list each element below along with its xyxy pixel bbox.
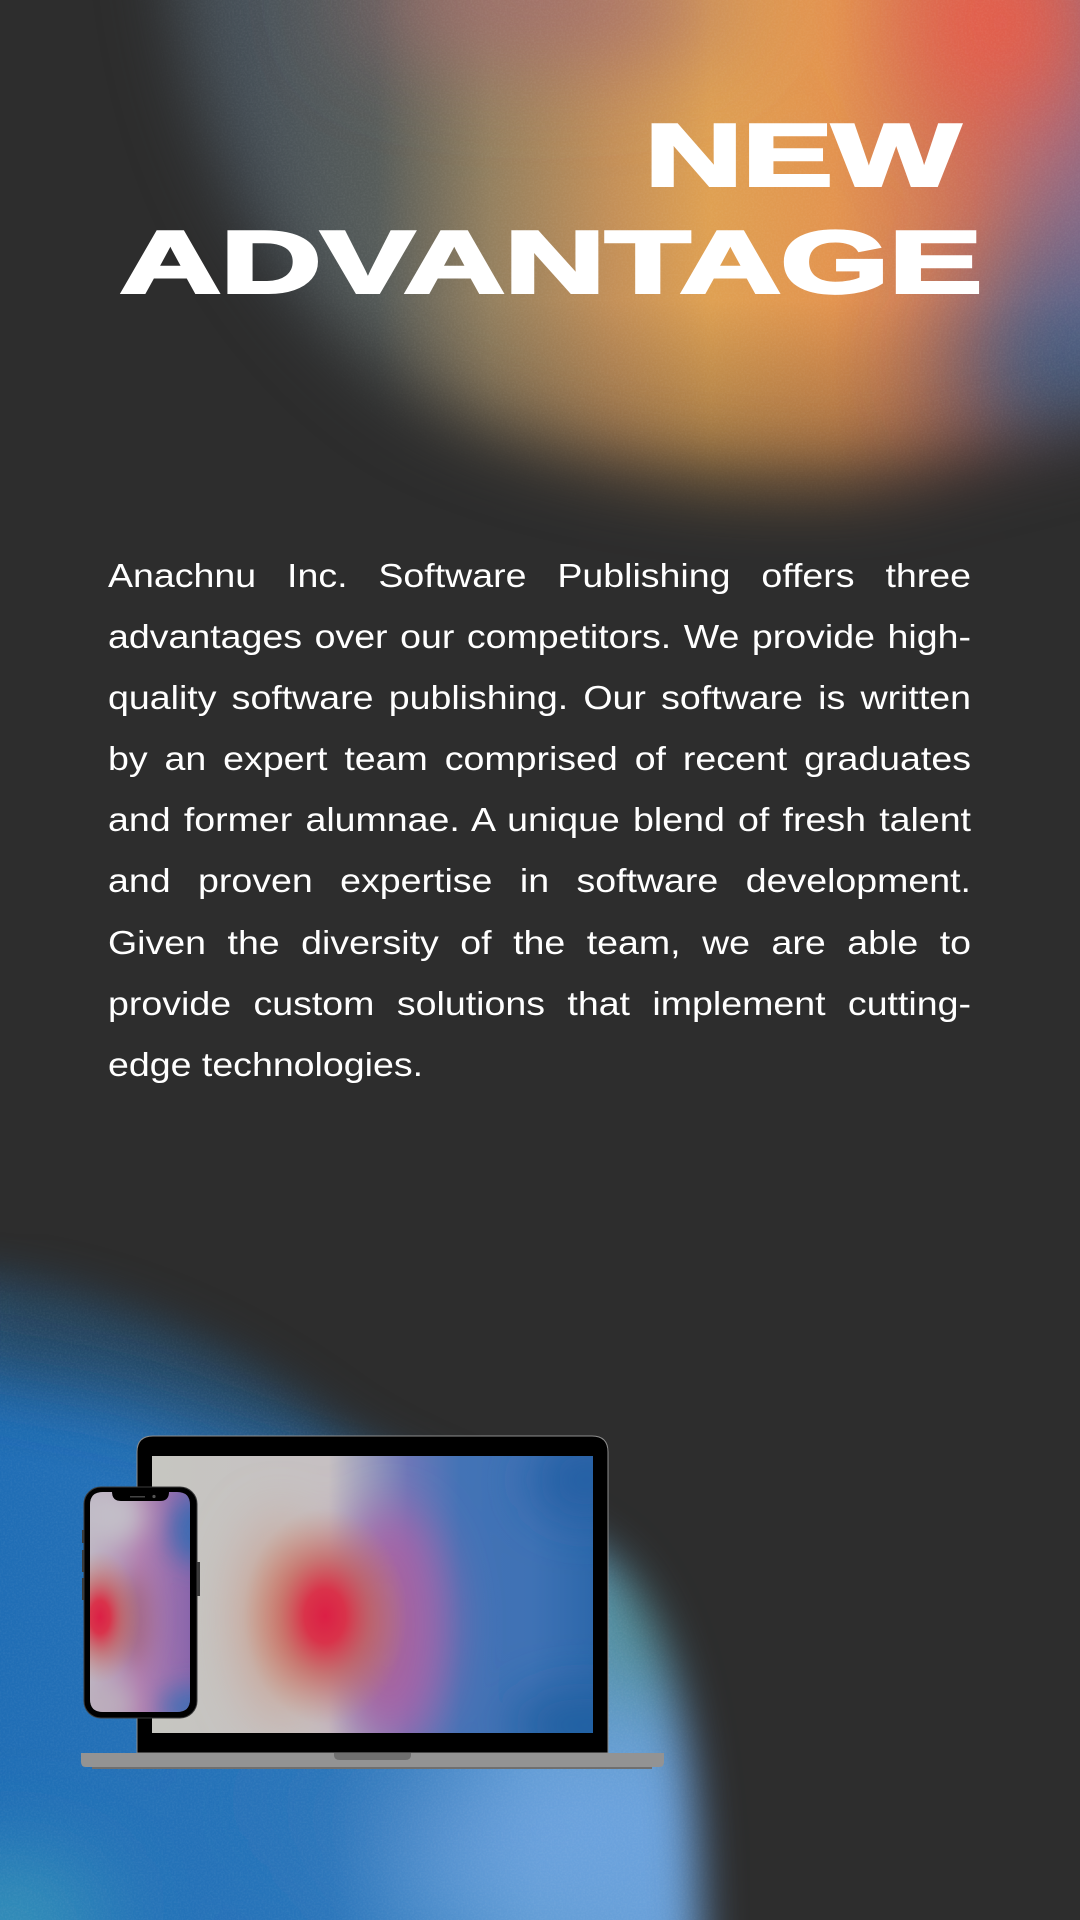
- body paragraph: advantages over our competitors. We provide high-: [108, 618, 971, 655]
- laptop base: [81, 1753, 664, 1767]
- laptop screen: [152, 1456, 593, 1733]
- phone: [82, 1486, 200, 1718]
- phone side buttons: [82, 1530, 200, 1600]
- grain texture over blobs: [233, 0, 1078, 444]
- body paragraph: provide custom solutions that implement cutting-: [108, 985, 971, 1022]
- laptop base shadow: [92, 1767, 652, 1769]
- body paragraph: Given the diversity of the team, we are able to: [108, 924, 971, 961]
- laptop lid: [137, 1436, 608, 1753]
- body paragraph: by an expert team comprised of recent graduates: [108, 740, 971, 777]
- device mockups: [81, 1436, 664, 1769]
- laptop: [81, 1436, 664, 1769]
- title: NEW: [645, 105, 960, 204]
- bottom blue gradient blob: [0, 1230, 750, 1920]
- phone speaker and camera: [130, 1496, 145, 1498]
- body paragraph: and former alumnae. A unique blend of fresh talent: [108, 801, 971, 838]
- body paragraph: quality software publishing. Our software is written: [108, 679, 971, 716]
- body paragraph: [108, 557, 971, 1083]
- phone screen: [90, 1492, 190, 1712]
- body paragraph: edge technologies.: [108, 1046, 423, 1083]
- body paragraph: Anachnu Inc. Software Publishing offers three: [108, 557, 971, 594]
- body paragraph: and proven expertise in software development.: [108, 862, 971, 899]
- top warm gradient blob: [149, 0, 1080, 530]
- laptop notch: [334, 1753, 411, 1760]
- title: [120, 105, 982, 311]
- phone body: [84, 1487, 197, 1718]
- title: ADVANTAGE: [120, 212, 982, 311]
